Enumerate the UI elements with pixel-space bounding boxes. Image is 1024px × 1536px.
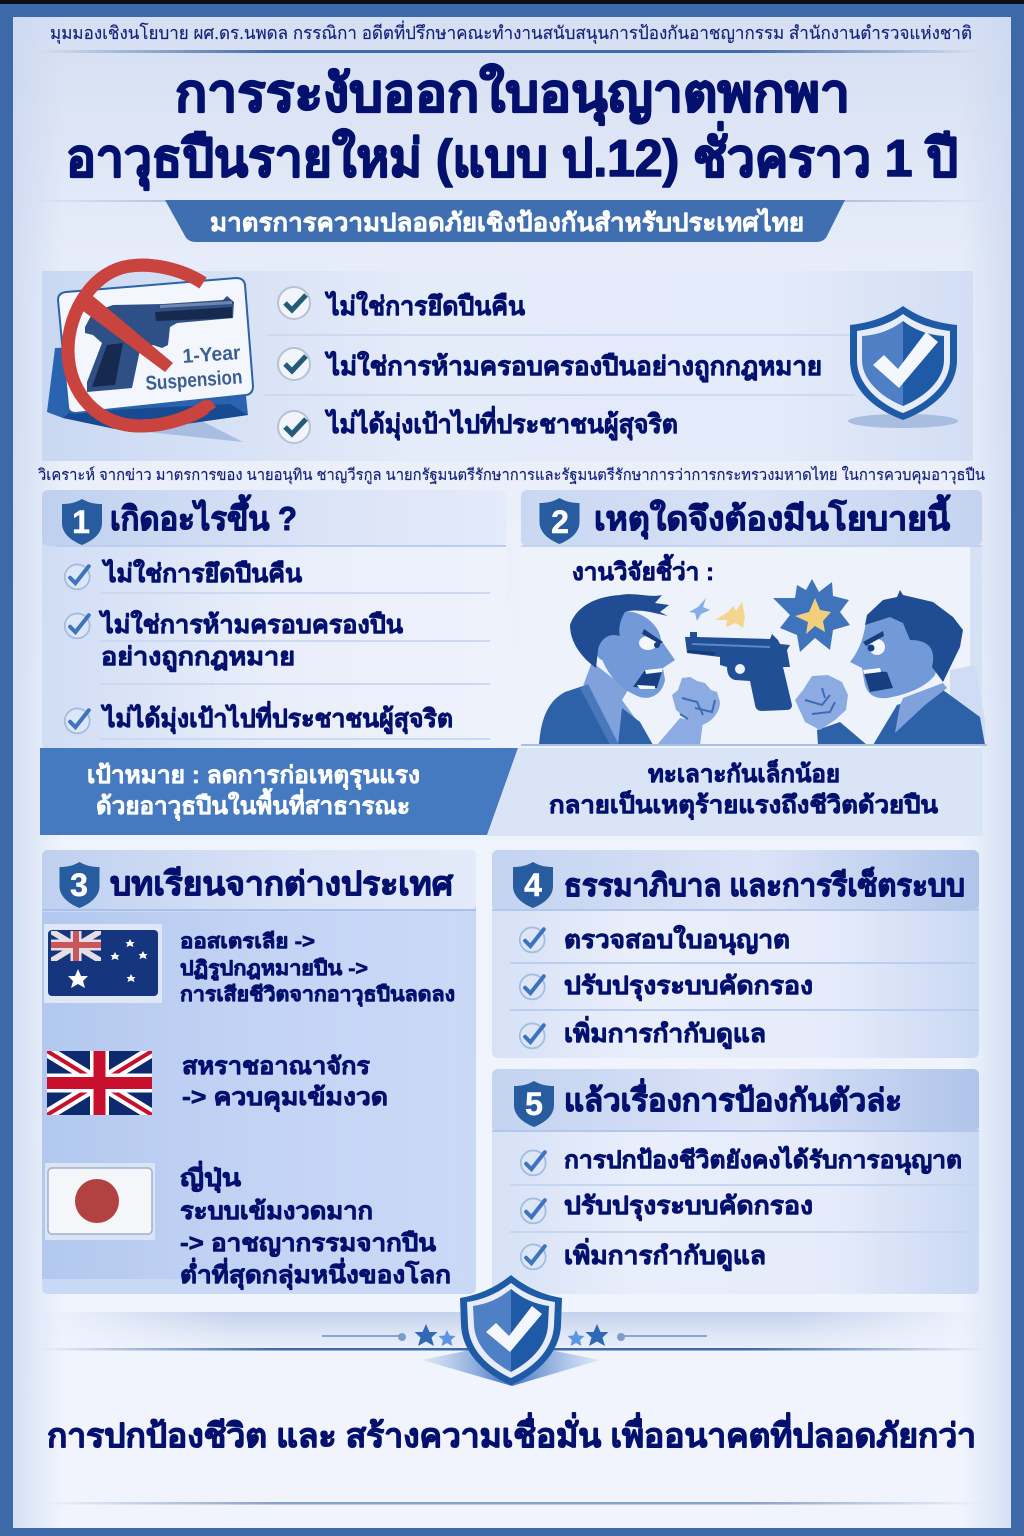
heading 5: แล้วเรื่องการป้องกันตัวล่ะ [564,1078,902,1118]
list 5: เพิ่มการกำกับดูแล [564,1238,766,1272]
title: อาวุธปืนรายใหม่ (แบบ ป.12) ชั่วคราว 1 ปี [66,122,958,191]
heading 4: ธรรมาภิบาล และการรีเซ็ตระบบ [564,866,965,903]
icon: shield with check [848,306,958,428]
icon: suspended gun licence card: Suspension [145,366,243,395]
list 1: ไม่ใช่การยึดปืนคืน [101,558,302,588]
result band: กลายเป็นเหตุร้ายแรงถึงชีวิตด้วยปืน [549,790,939,821]
badge 3: 3 [70,867,88,903]
badge 1: 1 [72,504,90,540]
subtitle banner: มาตรการความปลอดภัยเชิงป้องกันสำหรับประเทศไทย [210,207,804,237]
list 1: ไม่ได้มุ่งเป้าไปที่ประชาชนผู้สุจริต [100,701,453,735]
byline [40,20,980,53]
badge 2: 2 [551,504,569,540]
badge 5 [514,1081,554,1127]
text: Australia: ออสเตรเลีย -> [180,930,315,953]
text: United Kingdom [182,1053,388,1113]
research lead-in: งานวิจัยชี้ว่า : [572,553,714,586]
panel 2: why the policy [521,490,987,750]
badge 2 [540,498,580,544]
heading 2: เหตุใดจึงต้องมีนโยบายนี้ [594,494,951,540]
text: Australia: การเสียชีวิตจากอาวุธปืนลดลง [180,983,455,1007]
source note: วิเคราะห์ จากข่าว มาตรการของ นายอนุทิน ชาญวีรกูล นายกรัฐมนตรีรักษาการและรัฐมนตรีรักษาการว่าการกระทรวงมหาดไทย ในการควบคุมอาวุธปืน [38,466,985,485]
panel 5: self defence [492,1069,979,1294]
list 5: การปกป้องชีวิตยังคงได้รับการอนุญาต [564,1145,962,1176]
panel 3: lessons from abroad [42,850,476,1294]
badge 1 [62,499,102,545]
bottom rule [40,1502,985,1504]
goal band: ด้วยอาวุธปืนในพื้นที่สาธารณะ [96,787,410,822]
byline: มุมมองเชิงนโยบาย ผศ.ดร.นพดล กรรณิกา อดีตที่ปรึกษาคณะทำงานสนับสนุนการป้องกันอาชญากรรม สำนักงานตำรวจแห่งชาติ [50,20,972,44]
list 1: อย่างถูกกฎหมาย [101,643,295,673]
flag: Japan [45,1163,155,1240]
text: United Kingdom: สหราชอาณาจักร [182,1053,370,1080]
result band [487,748,983,836]
title [66,63,958,191]
list 5 [510,1145,975,1272]
text: Japan [180,1160,451,1291]
check list: ไม่ใช่การยึดปืนคืน [324,290,525,321]
check list [265,287,858,443]
icon: suspended gun licence card [47,265,253,442]
list 1 [65,558,490,740]
panel: not a confiscation [42,265,973,461]
list 4: เพิ่มการกำกับดูแล [564,1016,766,1050]
closing statement: การปกป้องชีวิต และ สร้างความเชื่อมั่น เพื่ออนาคตที่ปลอดภัยกว่า [47,1412,976,1454]
text: United Kingdom: -> ควบคุมเข้มงวด [182,1084,388,1113]
goal band: เป้าหมาย : ลดการก่อเหตุรุนแรง [87,762,420,791]
list 1: ไม่ใช่การห้ามครอบครองปืน [98,609,403,639]
heading 3: บทเรียนจากต่างประเทศ [110,865,454,902]
badge 3 [60,862,100,908]
check list: ไม่ใช่การห้ามครอบครองปืนอย่างถูกกฎหมาย [324,350,822,383]
list 4 [510,924,979,1050]
panel 1: what happened [42,490,506,750]
check list: ไม่ได้มุ่งเป้าไปที่ประชาชนผู้สุจริต [324,405,678,441]
panel 4: governance [492,850,979,1058]
list 4: ตรวจสอบใบอนุญาต [564,924,790,956]
footer emblem: shield and stars [40,1275,985,1386]
flag: Australia [44,924,162,1003]
title: การระงับออกใบอนุญาตพกพา [175,63,850,126]
text: Australia [180,930,455,1007]
badge 4: 4 [524,867,542,903]
badge 4 [513,862,553,908]
text: Australia: ปฏิรูปกฎหมายปืน -> [180,957,368,982]
list 4: ปรับปรุงระบบคัดกรอง [564,972,813,1002]
result band: ทะเลาะกันเล็กน้อย [648,759,840,788]
badge 5: 5 [525,1086,543,1122]
subtitle banner [30,200,994,242]
text: Japan: -> อาชญากรรมจากปืน [180,1230,437,1257]
text: Japan: ญี่ปุ่น [180,1160,242,1194]
illustration: two men arguing with gun [521,579,987,746]
goal band [40,748,518,835]
flag: United Kingdom [47,1051,152,1115]
text: Japan: ระบบเข้มงวดมาก [180,1198,373,1225]
list 5: ปรับปรุงระบบคัดกรอง [564,1192,813,1222]
text: Japan: ต่ำที่สุดกลุ่มหนึ่งของโลก [180,1257,451,1291]
icon: suspended gun licence card: 1-Year [182,342,241,368]
heading 1: เกิดอะไรขึ้น ? [110,494,297,537]
